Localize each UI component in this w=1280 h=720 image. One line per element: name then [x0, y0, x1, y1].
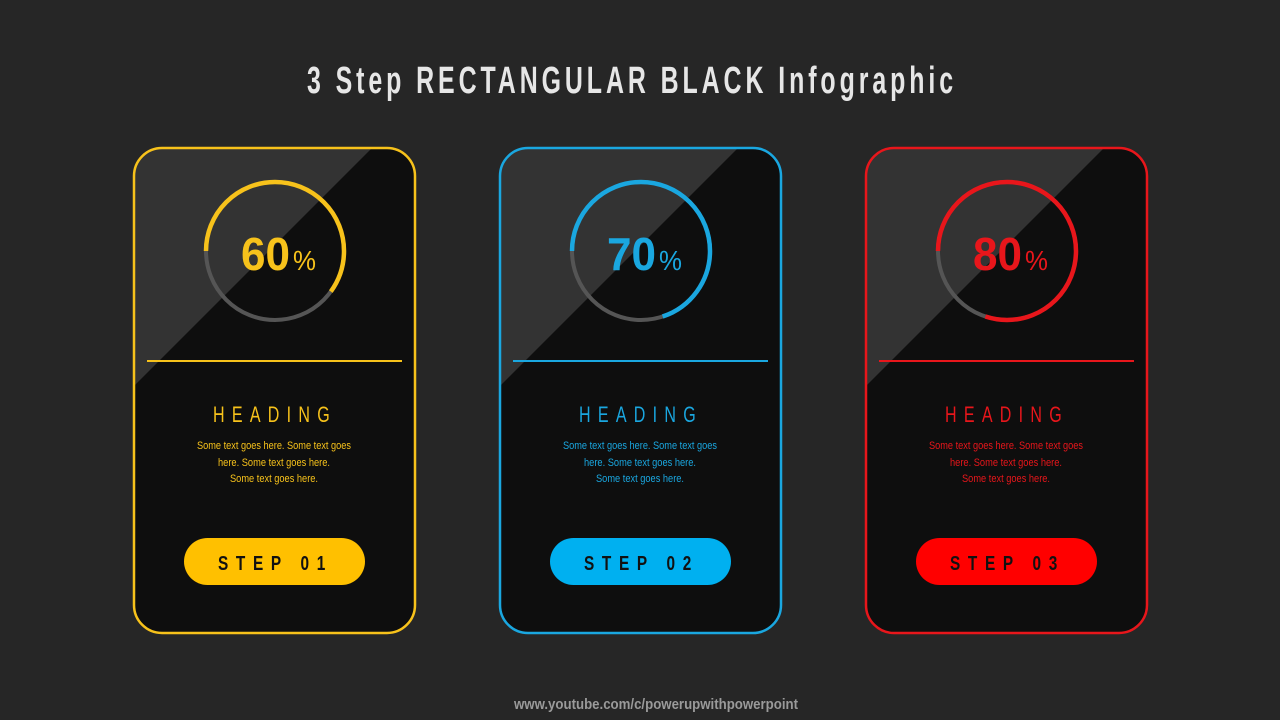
panel: step 01: [132, 146, 416, 634]
progress ring 60%: %: [293, 245, 316, 276]
progress ring 80%: [938, 182, 1076, 320]
button: STEP 03: [950, 553, 1065, 575]
body text: Some text goes here. Some text goes: [929, 440, 1083, 452]
progress ring 60%: 60: [241, 228, 290, 280]
progress ring 70%: 70: [607, 228, 656, 280]
progress ring 60%: [206, 182, 344, 320]
body text: here. Some text goes here.: [950, 457, 1062, 469]
body text: Some text goes here.: [596, 473, 684, 485]
body text: [197, 440, 351, 485]
progress ring 80%: 80: [973, 228, 1022, 280]
body text: Some text goes here. Some text goes: [563, 440, 717, 452]
panel: step 02: [498, 146, 782, 634]
button: [916, 538, 1097, 585]
panel: step 03: [864, 146, 1148, 634]
body text: Some text goes here.: [230, 473, 318, 485]
progress ring 70%: %: [659, 245, 682, 276]
footer url: www.youtube.com/c/powerupwithpowerpoint: [513, 696, 798, 713]
button: [184, 538, 365, 585]
body text: Some text goes here.: [962, 473, 1050, 485]
progress ring 80%: %: [1025, 245, 1048, 276]
body text: [563, 440, 717, 485]
heading: HEADING: [579, 402, 703, 427]
body text: [929, 440, 1083, 485]
progress ring 70%: [572, 182, 710, 320]
body text: Some text goes here. Some text goes: [197, 440, 351, 452]
body text: here. Some text goes here.: [218, 457, 330, 469]
body text: here. Some text goes here.: [584, 457, 696, 469]
heading: HEADING: [945, 402, 1069, 427]
title: 3 Step RECTANGULAR BLACK Infographic: [307, 60, 957, 102]
button: STEP 01: [218, 553, 333, 575]
button: [550, 538, 731, 585]
heading: HEADING: [213, 402, 337, 427]
button: STEP 02: [584, 553, 699, 575]
